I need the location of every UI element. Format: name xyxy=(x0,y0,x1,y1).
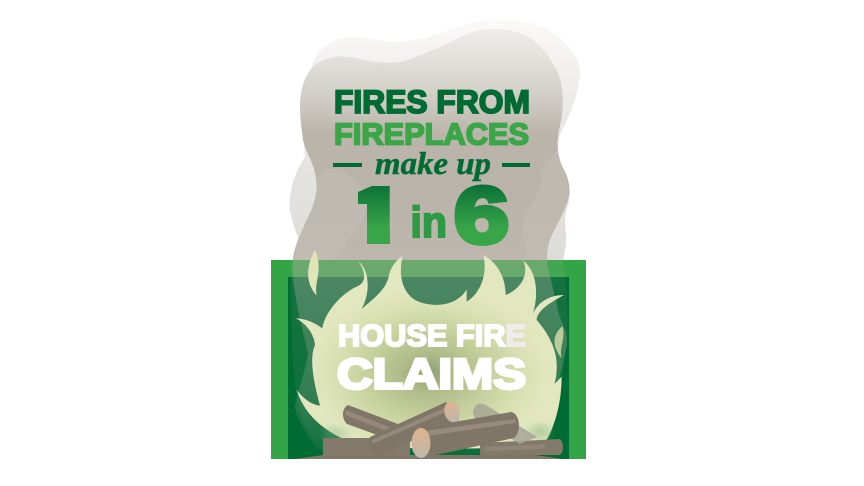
panel: fireplace xyxy=(271,260,586,459)
front log end xyxy=(412,428,430,458)
in: in xyxy=(410,198,447,247)
fireplace outer frame xyxy=(271,260,586,459)
front log xyxy=(420,412,519,458)
bottom left log xyxy=(323,438,410,456)
infographic xyxy=(271,29,586,459)
floor shadow xyxy=(295,455,563,459)
smoke: light back layer xyxy=(290,19,580,455)
CLAIMS: CLAIMS xyxy=(337,350,526,398)
number 1: 1 xyxy=(343,171,403,260)
logs xyxy=(295,400,563,459)
headline xyxy=(333,89,530,246)
smoke: lighter inner right band xyxy=(523,150,568,260)
flame small left xyxy=(308,250,319,296)
flame base glow right xyxy=(529,425,551,439)
right dash xyxy=(502,163,530,167)
inner light flame xyxy=(320,393,365,447)
fireplace inner opening xyxy=(288,277,569,459)
centre log end xyxy=(442,400,462,424)
flame small right xyxy=(555,326,563,358)
smoke: main layer xyxy=(293,29,569,455)
back right log xyxy=(473,404,537,444)
make up: make up xyxy=(375,145,491,181)
centre log xyxy=(369,402,459,456)
fire caption xyxy=(337,318,526,398)
smoke: lighter inner left band xyxy=(294,168,368,260)
smoke cloud xyxy=(290,19,580,455)
left angled log xyxy=(343,405,398,439)
bottom right log xyxy=(480,439,563,455)
HOUSE FIRE: HOUSE FIRE xyxy=(338,318,526,353)
flame base glow left xyxy=(323,428,347,440)
number 6: 6 xyxy=(454,170,509,260)
FIREPLACES: FIREPLACES xyxy=(334,116,529,151)
FIRES FROM: FIRES FROM xyxy=(334,84,530,120)
flames xyxy=(296,255,564,449)
left dash xyxy=(333,163,362,167)
